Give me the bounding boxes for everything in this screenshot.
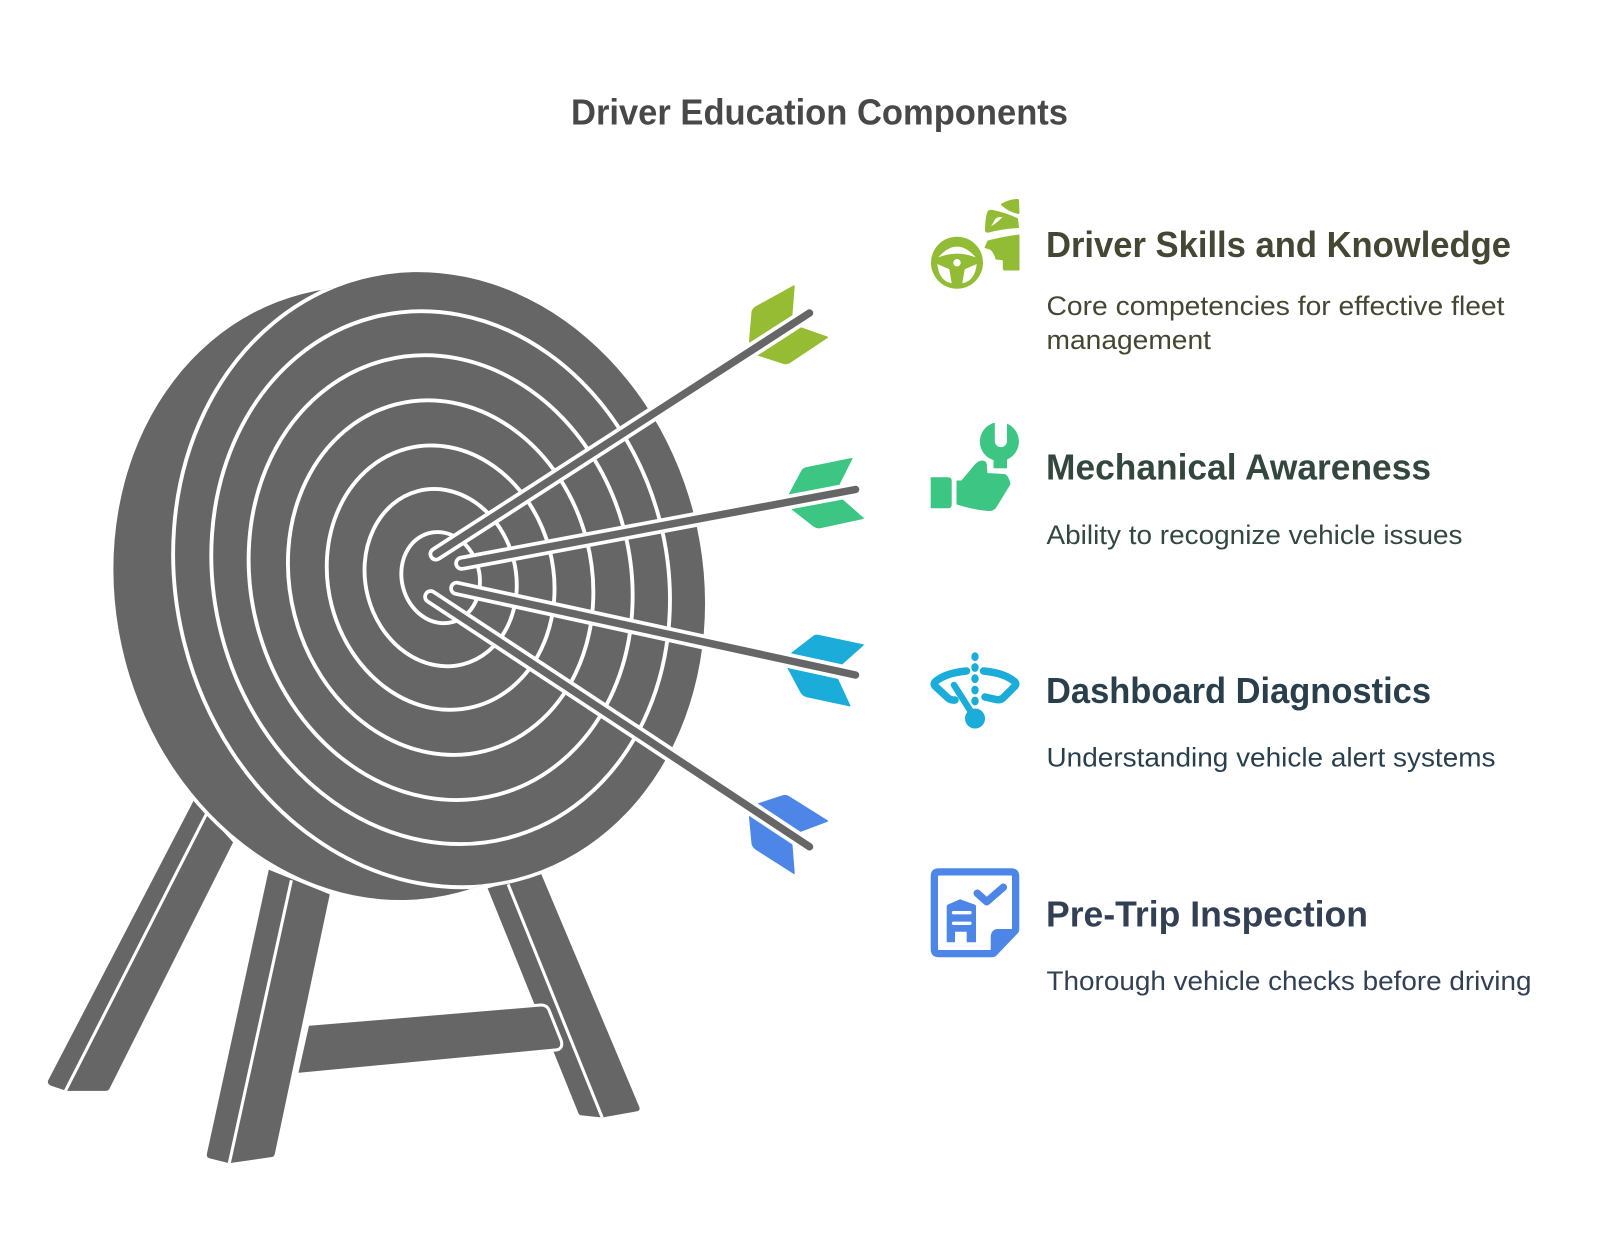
right leg [488, 873, 640, 1117]
crossbar [296, 1005, 562, 1075]
icon: inspection checklist [931, 868, 1019, 957]
arrow: dashboard diagnostics (cyan) [457, 588, 863, 706]
title: Driver Education Components [571, 92, 1068, 132]
description: pre-trip inspection: Thorough vehicle checks before driving [1046, 966, 1532, 996]
target on stand [48, 272, 706, 1163]
arrow: pre-trip inspection (blue) [431, 597, 827, 873]
description: driver skills [1046, 291, 1505, 355]
description: mechanical awareness: Ability to recognize vehicle issues [1046, 520, 1462, 550]
icon: dashboard wiper gauge [934, 652, 1016, 728]
stand legs [48, 799, 640, 1164]
scoring rings [154, 261, 727, 895]
arrow: driver skills (lime) [436, 286, 827, 554]
heading: dashboard diagnostics: Dashboard Diagnostics [1046, 670, 1431, 711]
left leg [48, 799, 233, 1091]
description: driver skills: Core competencies for effective fleet [1046, 291, 1505, 321]
arrow: mechanical awareness (green) [462, 459, 863, 563]
target board [113, 272, 706, 900]
infographic: driver education components [48, 98, 1530, 1163]
rear face [47, 228, 711, 959]
front face [108, 214, 771, 944]
centre leg [205, 868, 331, 1164]
icon: steering wheel and driver [931, 200, 1019, 289]
description: driver skills: management [1046, 325, 1212, 355]
icon: hand with wrench [931, 423, 1019, 511]
board gap outline [47, 214, 771, 959]
heading: driver skills: Driver Skills and Knowledge [1046, 224, 1511, 265]
front edge line [171, 288, 484, 890]
heading: pre-trip inspection: Pre-Trip Inspection [1046, 894, 1368, 934]
description: dashboard diagnostics: Understanding vehicle alert systems [1046, 742, 1496, 772]
heading: mechanical awareness: Mechanical Awareness [1046, 446, 1431, 488]
